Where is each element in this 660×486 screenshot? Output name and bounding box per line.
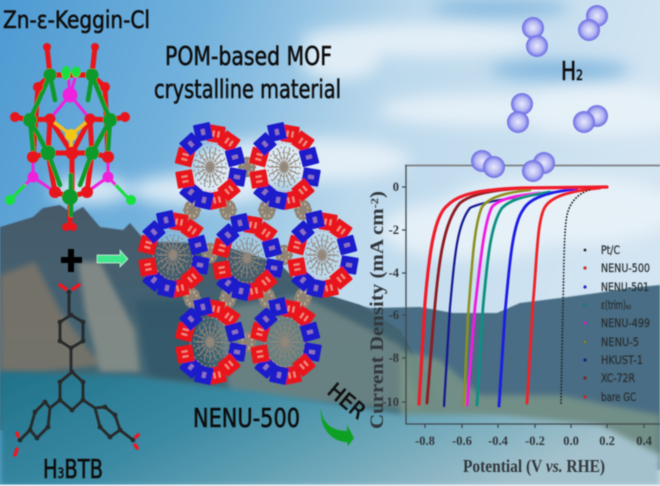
heading: POM-based MOF crystalline material: crystalline material	[154, 75, 341, 105]
curve: XC-72R	[427, 188, 530, 403]
y axis tick labels	[382, 180, 400, 409]
curve: ε(trim)	[477, 192, 550, 405]
y axis tick labels: 0	[393, 180, 399, 194]
legend: NENU-500	[601, 261, 650, 275]
y axis title: )	[368, 191, 388, 198]
heading: POM-based MOF crystalline material	[154, 42, 341, 105]
legend: NENU-5	[601, 335, 639, 349]
legend: NENU-499	[601, 316, 650, 330]
curve: bare GC	[419, 187, 607, 404]
label: HER: HER	[323, 378, 370, 424]
icon group: H2 molecules crossing chart top	[471, 150, 555, 182]
y axis tick labels: -4	[389, 266, 400, 280]
heading: POM-based MOF crystalline material: POM-based MOF	[165, 42, 332, 72]
icon group: H2 molecules	[507, 5, 608, 133]
y axis title: Current Density (mA cm	[368, 234, 388, 429]
legend: HKUST-1	[601, 353, 643, 367]
y axis tick labels: -10	[382, 395, 399, 409]
x axis tick labels: 0.2	[599, 434, 615, 448]
background: left and centre mountain	[0, 205, 450, 430]
legend	[584, 243, 650, 404]
arrow: green curved HER arrow	[321, 408, 354, 446]
icon: black plus	[61, 249, 82, 272]
MOF framework: NENU-500	[138, 122, 359, 385]
x axis tick labels: 0.4	[636, 434, 653, 448]
background: distant right mountains	[300, 285, 660, 470]
curve: NENU-5	[464, 190, 530, 405]
legend: bare GC	[601, 390, 636, 404]
arrow: green arrow to MOF	[97, 250, 128, 267]
x axis tick labels	[415, 434, 653, 448]
curve: NENU-499	[467, 193, 540, 405]
y axis tick labels: -6	[389, 308, 399, 322]
y axis tick labels: -2	[389, 223, 399, 237]
legend: ε(trim)4/3	[601, 298, 631, 312]
y axis tick labels: -8	[389, 351, 399, 365]
curve: Pt/C	[561, 189, 592, 403]
x axis title: Potential (V vs. RHE)	[463, 456, 605, 477]
background: lake	[0, 372, 660, 486]
x axis tick labels: -0.4	[488, 434, 509, 448]
x axis tick labels: -0.6	[452, 434, 472, 448]
chart: LSV polarization curves	[368, 165, 660, 477]
title: Zn-ε-Keggin-Cl: Zn-ε-Keggin-Cl	[3, 6, 150, 34]
label: H3BTB: H3BTB	[43, 455, 103, 485]
curve: NENU-501	[499, 189, 575, 406]
chart frame and ticks	[402, 165, 660, 428]
label: H2: H2	[561, 57, 583, 87]
x axis tick labels: -0.2	[525, 434, 545, 448]
molecule: H3BTB linker	[15, 285, 138, 455]
legend: Pt/C	[601, 243, 620, 257]
label: NENU-500: NENU-500	[193, 404, 300, 434]
legend: XC-72R	[601, 371, 635, 385]
x axis tick labels: -0.8	[415, 434, 435, 448]
curve: NENU-500	[527, 188, 600, 403]
y axis title: -2	[369, 197, 381, 208]
background: sunlit cliffs and slopes	[0, 262, 660, 460]
curve: HKUST-1	[444, 189, 577, 406]
molecule: Zn-ε-Keggin cluster	[5, 43, 136, 231]
legend: NENU-501	[601, 280, 649, 294]
x axis tick labels: 0.0	[563, 434, 579, 448]
curves	[419, 187, 607, 406]
bottom edge strip	[0, 484, 660, 486]
